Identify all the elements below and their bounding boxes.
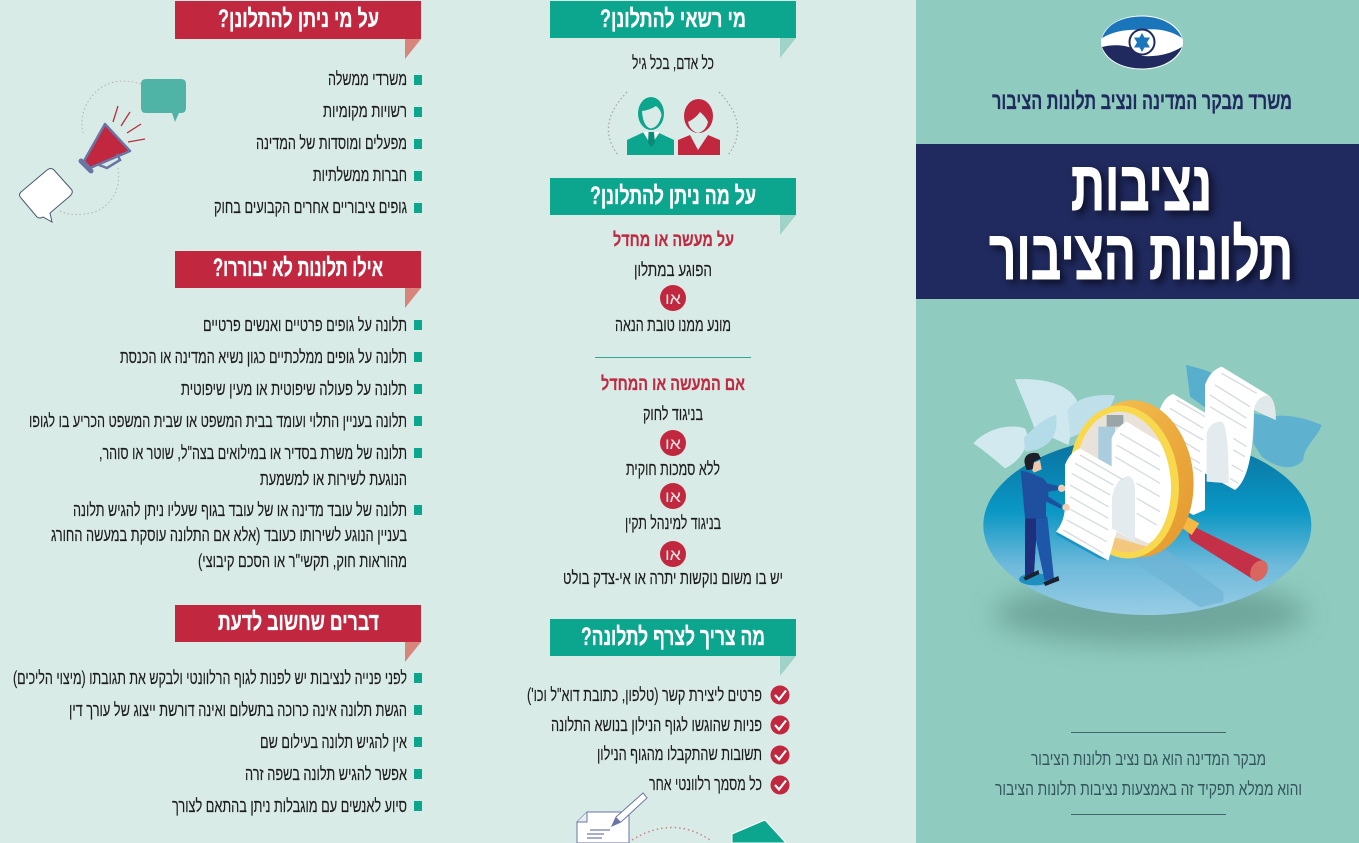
list <box>214 69 422 217</box>
heading: אילו תלונות לא יבוררו? <box>213 254 383 282</box>
icon: man and woman <box>608 92 738 155</box>
panel: what may be complained about: ללא סמכות חוקית <box>626 459 720 479</box>
platform disc <box>983 436 1311 615</box>
title <box>989 147 1293 294</box>
icon: state comptroller logo <box>1101 16 1183 70</box>
heading: על מה ניתן להתלונן? <box>590 182 756 210</box>
panel: what may be complained about: הפוגע במתלון <box>634 260 712 280</box>
title: נציבות <box>1071 147 1212 225</box>
panel: cover <box>916 0 1359 843</box>
front scroll <box>1056 448 1135 561</box>
back scroll <box>1205 367 1276 490</box>
icon: folder <box>732 820 786 843</box>
list: חברות ממשלתיות <box>313 165 407 185</box>
or badge: או <box>665 547 681 564</box>
panel: what may be complained about: בניגוד לחוק <box>643 404 703 424</box>
list: תלונה בעניין התלוי ועומד בבית המשפט או שבית המשפט הכריע בו לגופו <box>29 411 407 431</box>
list: הנוגעת לשירות או למשמעת <box>260 469 407 489</box>
title band <box>916 144 1359 299</box>
list: תלונה על גופים פרטיים ואנשים פרטיים <box>203 315 407 335</box>
subheading: אם המעשה או המחדל <box>601 374 745 395</box>
list: תלונה על גופים ממלכתיים כגון נשיא המדינה או הכנסת <box>120 347 407 367</box>
or badge <box>660 285 686 311</box>
list: משרדי ממשלה <box>328 69 407 89</box>
heading <box>550 178 796 235</box>
list: בעניין הנוגע לשירותו כעובד (אלא אם התלונה עוסקת במעשה החורג <box>51 525 407 545</box>
heading <box>175 605 421 662</box>
or badge: או <box>665 436 681 453</box>
intro text: מבקר המדינה הוא גם נציב תלונות הציבור <box>1031 749 1266 769</box>
intro text <box>995 732 1302 814</box>
panel: who can be complained about <box>20 1 422 222</box>
leaves <box>1015 379 1077 445</box>
heading: מי רשאי להתלונן? <box>600 5 746 33</box>
list: אפשר להגיש תלונה בשפה זרה <box>245 764 407 784</box>
heading <box>175 1 421 59</box>
lens ring <box>1071 394 1201 563</box>
list: גופים ציבוריים אחרים הקבועים בחוק <box>214 197 407 217</box>
icon: megaphone with speech bubbles <box>20 79 186 222</box>
panel: who may complain <box>550 1 796 155</box>
checklist item: כל מסמך רלוונטי אחר <box>649 774 762 794</box>
text: כל אדם, בכל גיל <box>632 53 714 73</box>
heading: מה צריך לצרף לתלונה? <box>581 623 765 651</box>
list: אין להגיש תלונה בעילום שם <box>260 732 407 752</box>
checklist item: פניות שהוגשו לגוף הנילון בנושא התלונה <box>551 715 762 735</box>
list: רשויות מקומיות <box>323 101 407 121</box>
list <box>29 315 422 571</box>
icon: document with pen <box>577 793 710 843</box>
or badge <box>660 430 686 456</box>
or badge: או <box>665 489 681 506</box>
heading: דברים שחשוב לדעת <box>218 608 379 636</box>
magnifying glass handle <box>1189 525 1266 582</box>
heading <box>550 619 796 676</box>
or badge: או <box>665 291 681 308</box>
heading: על מי ניתן להתלונן? <box>218 5 379 33</box>
panel: what may be complained about: יש בו משום נוקשות יתרה או אי-צדק בולט <box>563 568 783 588</box>
illustration: person examining documents with magnifying glass <box>973 365 1322 645</box>
subheading: על מעשה או מחדל <box>613 230 734 251</box>
checklist item: פרטים ליצירת קשר (טלפון, כתובת דוא"ל וכו') <box>527 685 762 705</box>
list: תלונה של עובד מדינה או של עובד בגוף שעליו ניתן להגיש תלונה <box>73 500 407 520</box>
person <box>1019 573 1051 585</box>
list: לפני פנייה לנציבות יש לפנות לגוף הרלוונטי ולבקש את תגובתו (מיצוי הליכים) <box>13 668 407 688</box>
panel: what may be complained about: מונע ממנו טובת הנאה <box>615 315 731 335</box>
list: תלונה של משרת בסדיר או במילואים בצה"ל, שוטר או סוהר, <box>99 443 407 463</box>
panel: what to attach <box>527 619 796 843</box>
panel: important to know <box>13 605 422 816</box>
list: תלונה על פעולה שיפוטית או מעין שיפוטית <box>181 379 407 399</box>
list: סיוע לאנשים עם מוגבלות ניתן בהתאם לצורך <box>172 796 407 816</box>
heading <box>175 251 421 308</box>
list: מפעלים ומוסדות של המדינה <box>256 133 407 153</box>
checklist item: תשובות שהתקבלו מהגוף הנילון <box>597 744 762 764</box>
or badge <box>660 541 686 567</box>
panel: what may be complained about: בניגוד למינהל תקין <box>625 513 721 533</box>
list: מהוראות חוק, תקשי"ר או הסכם קיבוצי) <box>198 551 407 571</box>
heading <box>550 1 796 58</box>
list: הגשת תלונה אינה כרוכה בתשלום ואינה דורשת ייצוג של עורך דין <box>69 700 407 720</box>
or badge <box>660 483 686 509</box>
panel: what may be complained about <box>550 178 796 588</box>
panel: complaints not investigated <box>29 251 422 571</box>
list <box>13 668 422 816</box>
